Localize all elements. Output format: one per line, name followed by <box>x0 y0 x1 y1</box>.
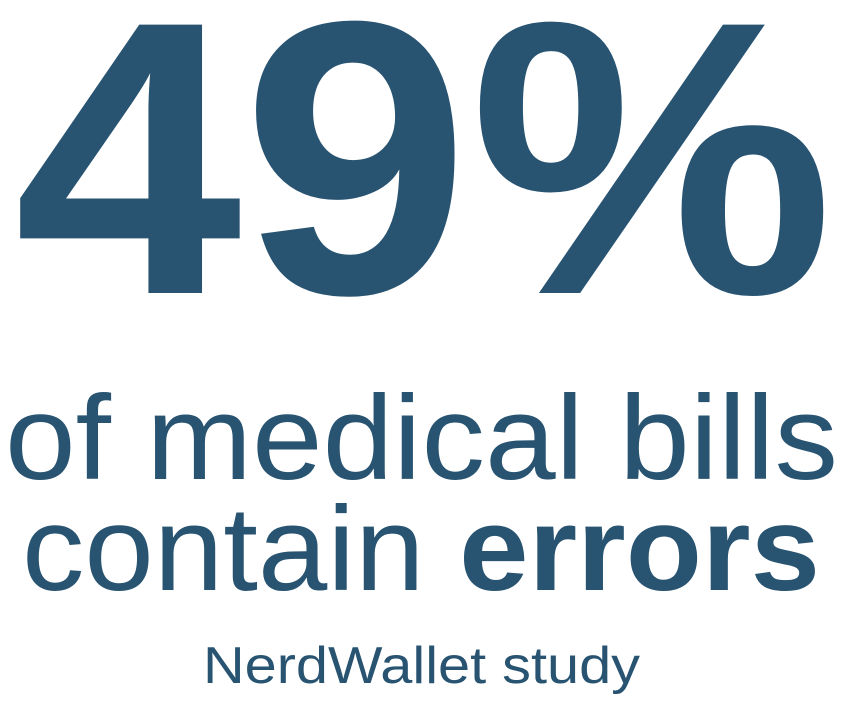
text: contain errors: contain errors <box>22 482 820 616</box>
source: NerdWallet study: NerdWallet study <box>203 637 640 695</box>
text: of medical bills: of medical bills <box>5 371 838 505</box>
